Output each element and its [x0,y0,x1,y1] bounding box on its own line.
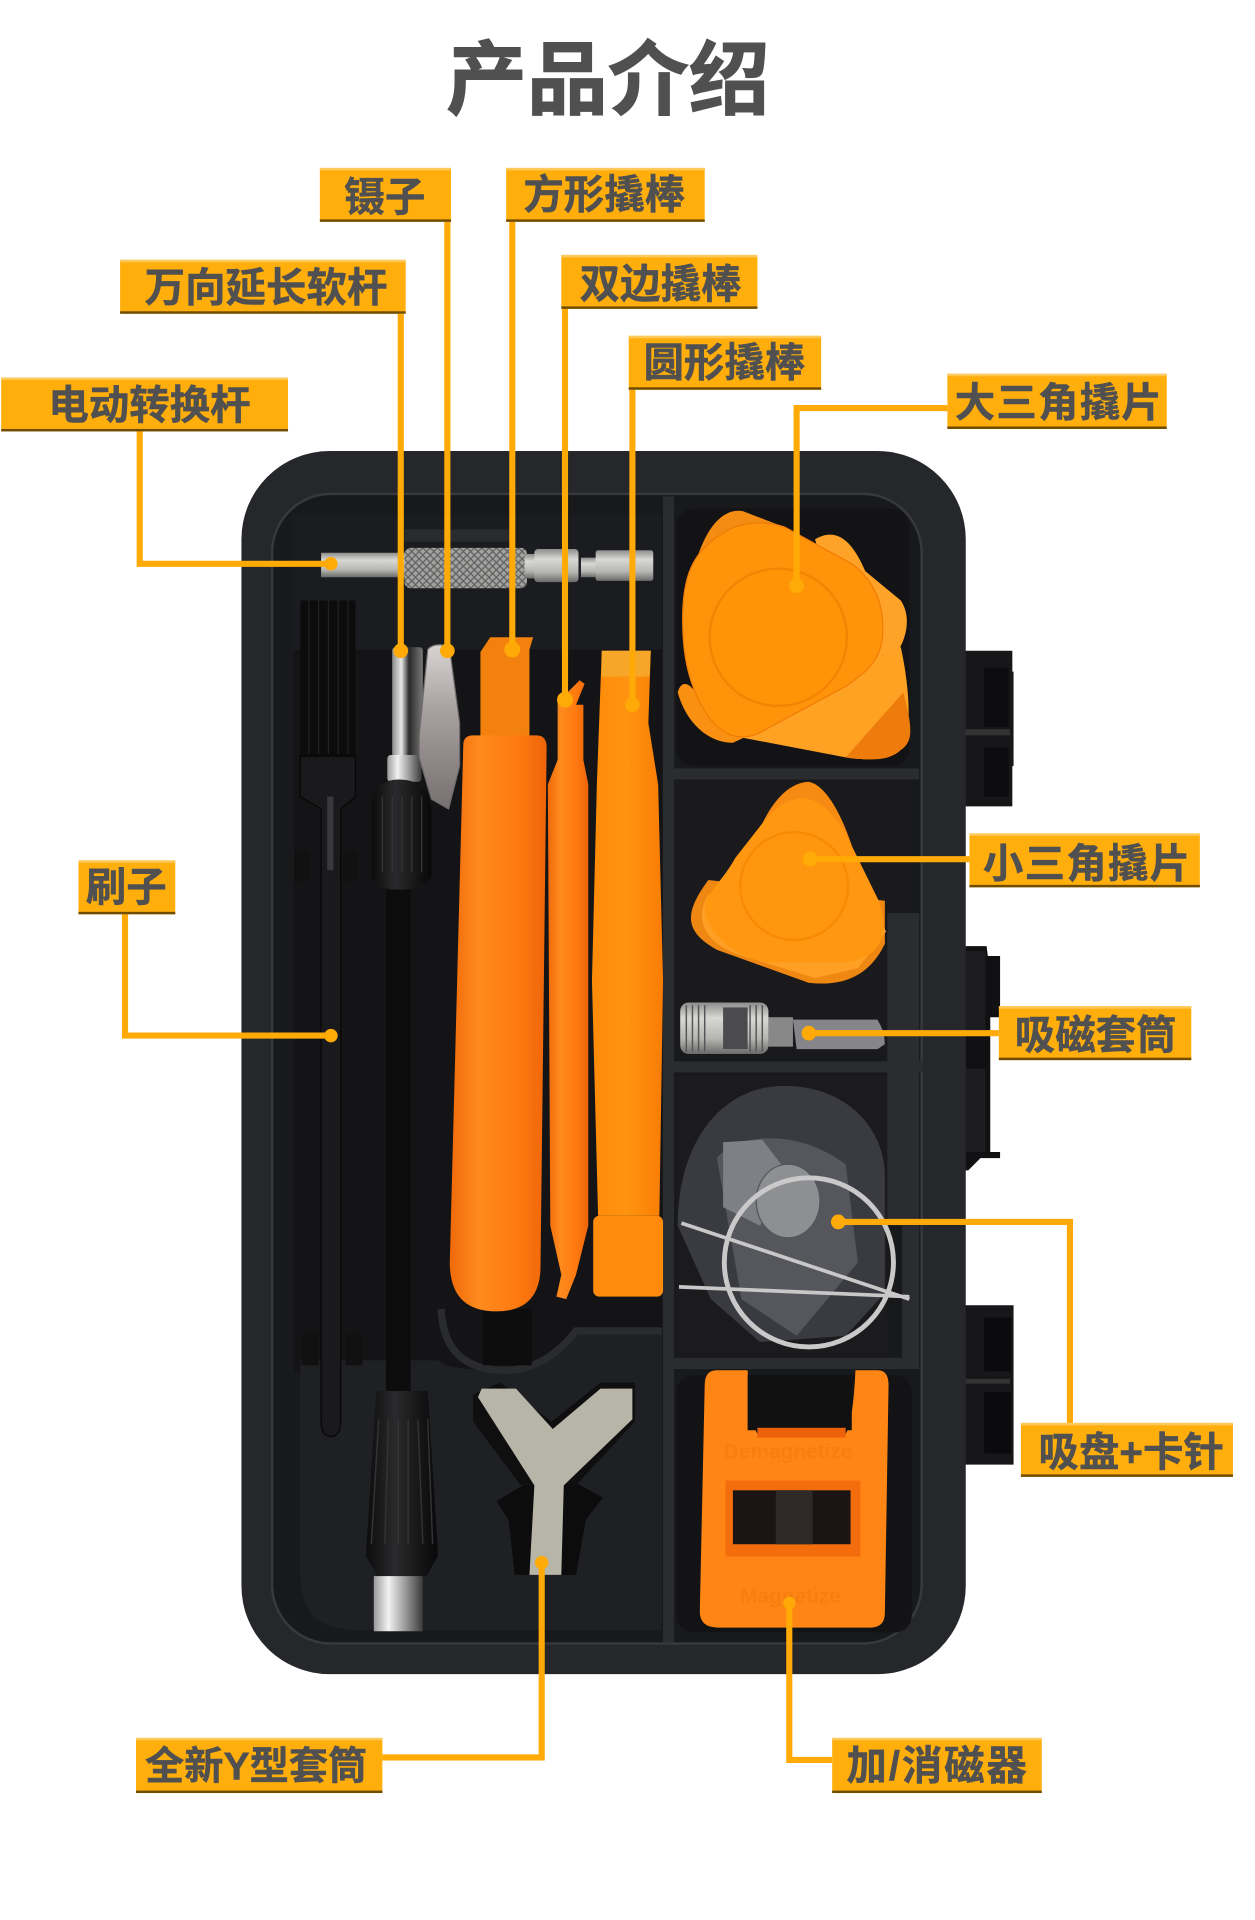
hinge: middle [941,946,1000,1170]
item: electric adapter rod [321,529,653,588]
callout: small triangular picks [803,833,1200,887]
callout: double-ended pry bar [557,255,757,708]
callout: small triangular picks: 小三角撬片 [983,841,1191,887]
item: small triangular picks [691,782,886,984]
panel: toolbox [241,451,1014,1674]
title: 产品介绍 [446,36,770,126]
item: double-ended pry bar [548,680,588,1299]
item: magnetic socket [680,1003,885,1054]
callout: new Y socket: 全新Y型套筒 [145,1746,367,1789]
box inner tray [272,494,922,1644]
cradle below pry bars [441,1309,662,1370]
item: round pry bar [592,651,663,1297]
callout: brush: 刷子 [86,864,167,910]
hinge: lower [963,1305,1014,1465]
callout: large triangular picks [789,374,1167,593]
item: magnetizer / demagnetizer: Demagnetize [724,1440,852,1463]
hinge: upper [963,651,1014,806]
callout: magnetizer [783,1597,1042,1793]
item: tweezers in clear sleeve [419,645,460,809]
callout: magnetic socket: 吸磁套筒 [1015,1012,1177,1058]
left compartment floor [300,1331,662,1630]
callout: magnetizer: 加/消磁器 [846,1743,1029,1789]
item: flexible extension shaft [363,647,438,1631]
right compartment dividers [663,496,923,1642]
item: brush [294,601,363,1436]
callout: round pry bar: 圆形撬棒 [643,339,805,385]
callout: tweezers: 镊子 [344,174,425,220]
item: large triangular picks [678,511,910,759]
callout: tweezers [320,168,455,658]
callout: large triangular picks: 大三角撬片 [955,380,1163,426]
item: square pry bar [450,637,547,1311]
callout: new Y socket [136,1556,548,1793]
callout: square pry bar: 方形撬棒 [523,171,685,217]
item: magnetizer / demagnetizer [700,1370,889,1628]
item: suction cup with ring and pin [678,1086,909,1347]
callout: suction cup and pin [831,1215,1233,1477]
right compartment floors [677,509,909,766]
callout: square pry bar [504,168,705,658]
callout: suction cup and pin: 吸盘+卡针 [1039,1429,1224,1475]
callout: double-ended pry bar: 双边撬棒 [580,261,741,307]
item: Y socket wrench [473,1382,635,1575]
callout: brush [78,860,338,1042]
callout: round pry bar [625,336,821,712]
callout: universal extension shaft: 万向延长软杆 [145,264,387,310]
callout: universal extension shaft [120,260,408,658]
box outer shell [241,451,966,1674]
item: magnetizer / demagnetizer: Magnetize [740,1585,841,1608]
callout: electric adapter rod [1,377,338,571]
callout: electric adapter rod: 电动转换杆 [48,382,251,428]
callout: magnetic socket [802,1006,1191,1060]
